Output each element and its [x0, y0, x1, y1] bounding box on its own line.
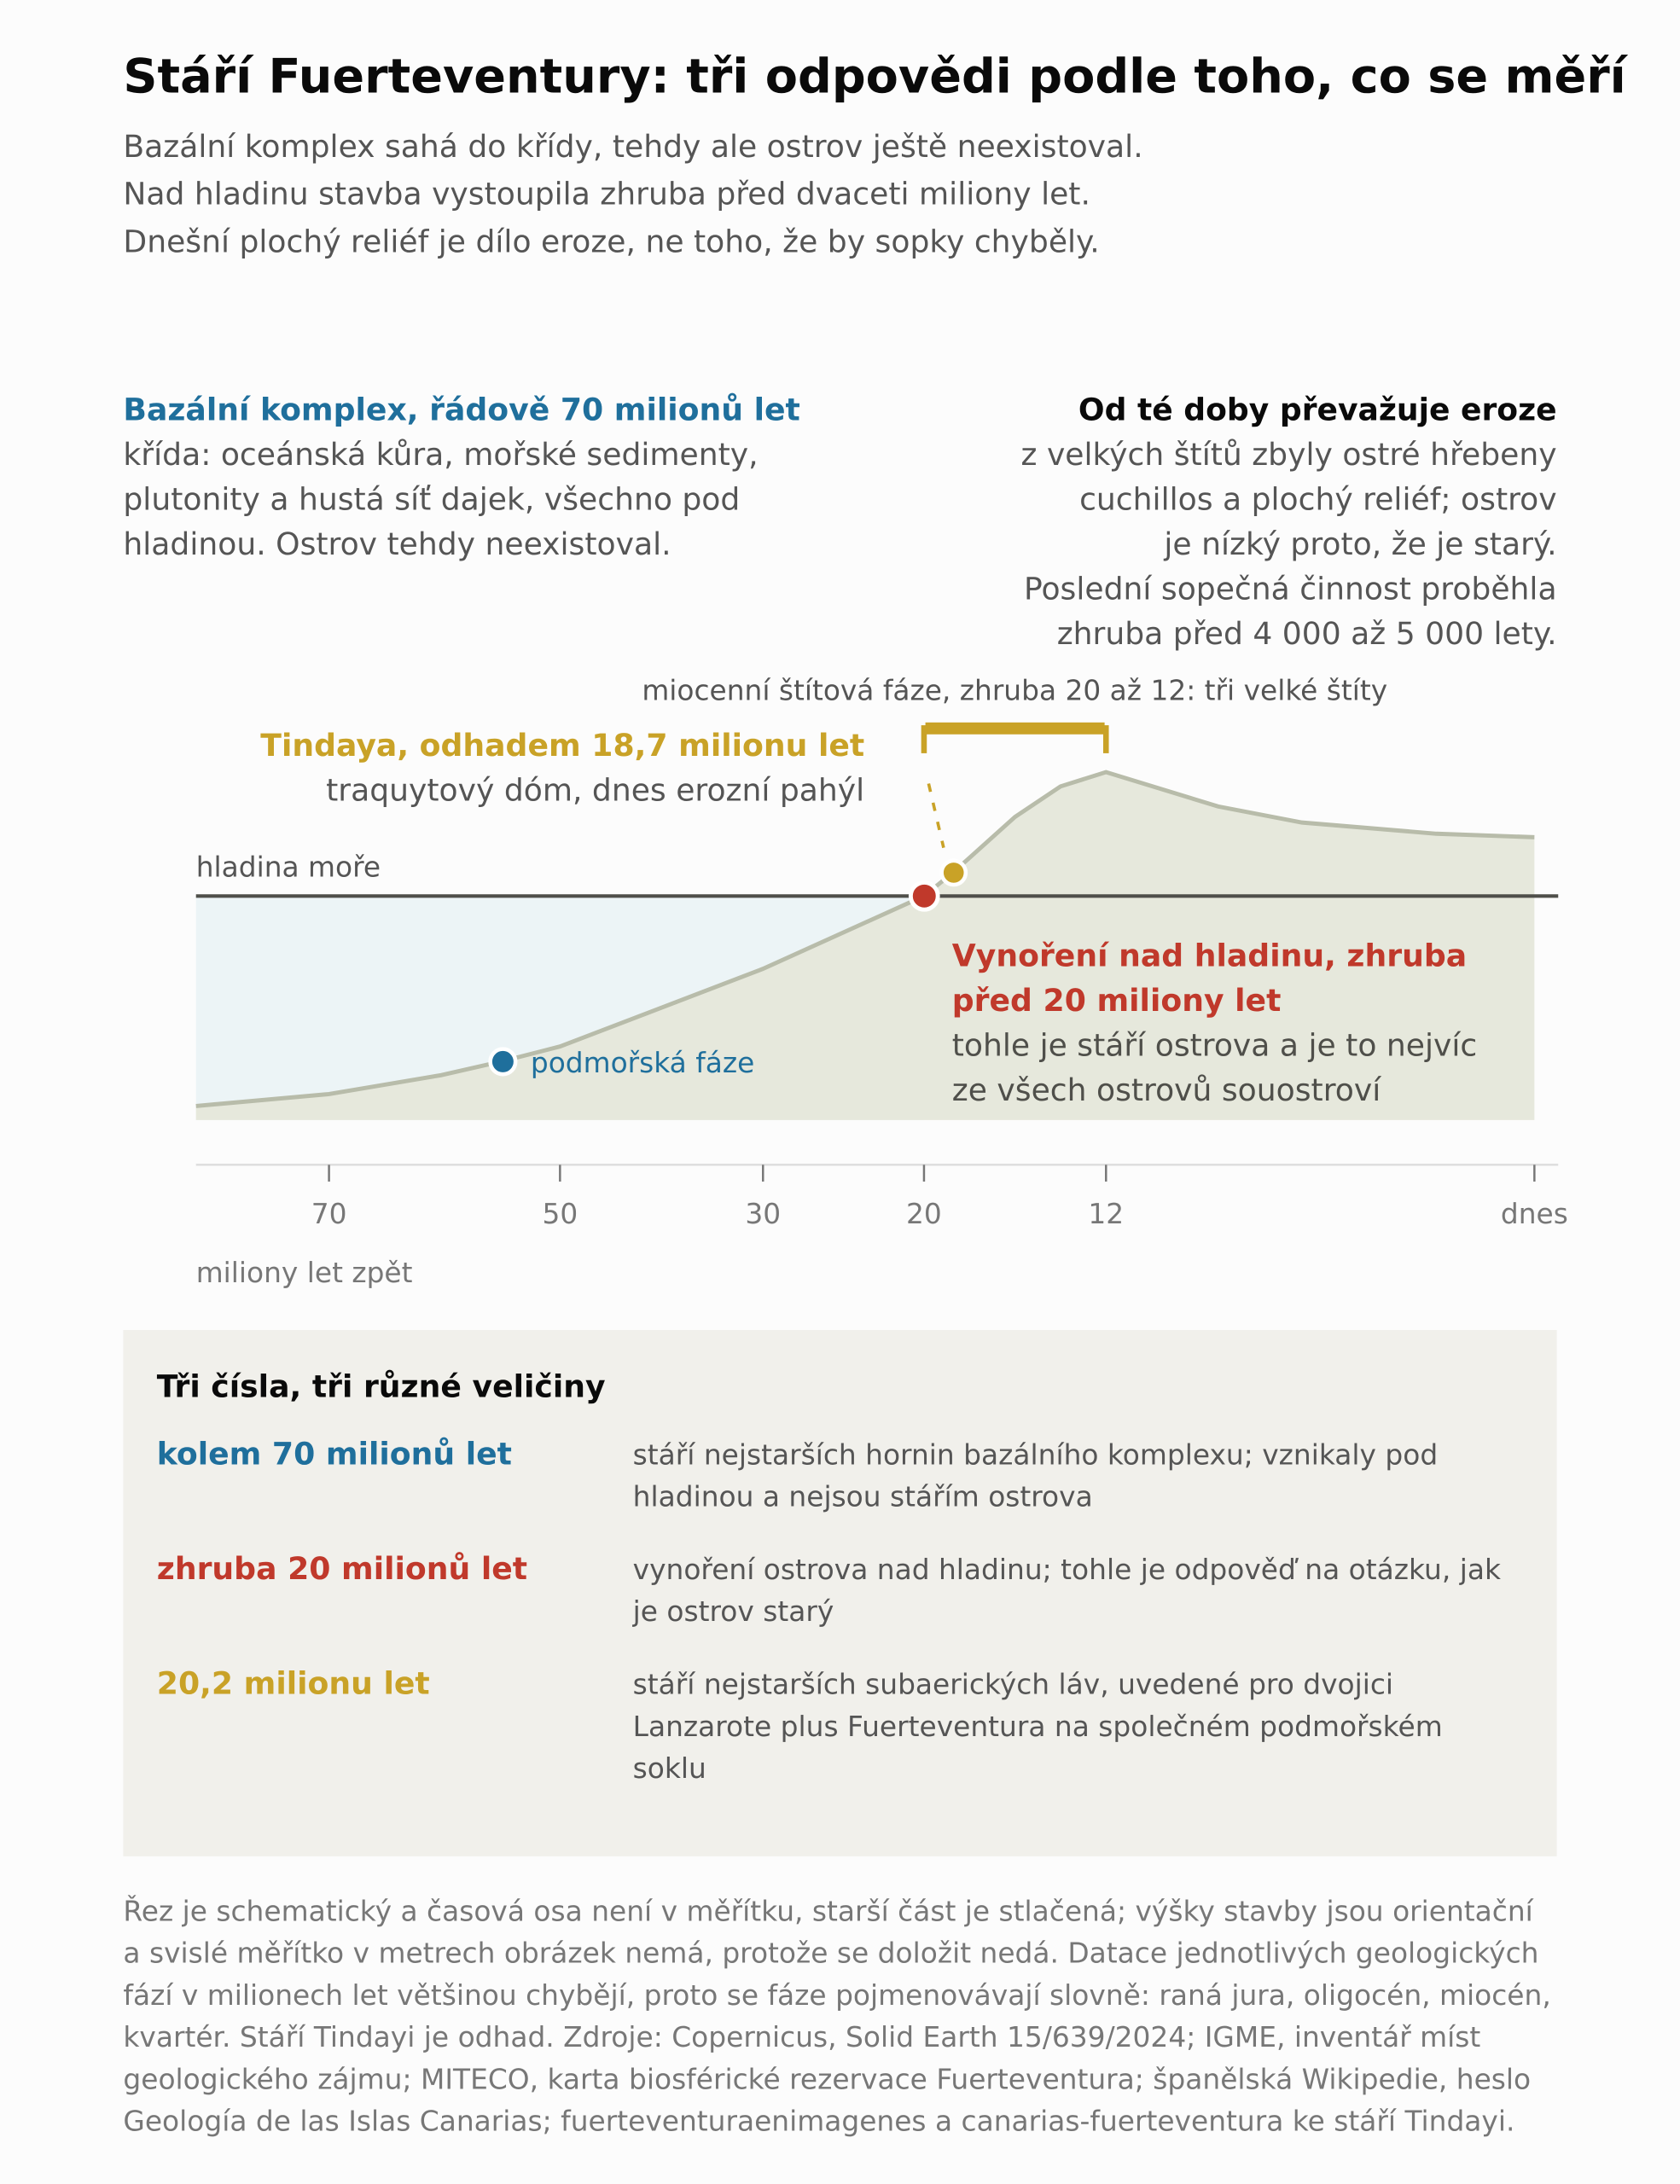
annotation: erosion: Poslední sopečná činnost proběhla [1024, 572, 1557, 607]
annotation: erosion: je nízký proto, že je starý. [1163, 528, 1557, 563]
annotation: basal complex: hladinou. Ostrov tehdy neexistoval. [123, 528, 671, 563]
time axis: 20 [906, 1197, 942, 1230]
Tindaya label [260, 729, 865, 810]
chart: island cross-section [196, 673, 1568, 1289]
footnote: Geología de las Islas Canarias; fuerteventuraenimagenes a canarias-fuerteventura ke stáří Tindayi. [123, 2104, 1514, 2138]
Tindaya leader line [928, 784, 944, 848]
footnote: a svislé měřítko v metrech obrázek nemá, protože se doložit nedá. Datace jednotlivých geologických [123, 1936, 1538, 1970]
annotation: basal complex: Bazální komplex, řádově 70 milionů let [123, 392, 801, 428]
subtitle: Nad hladinu stavba vystoupila zhruba před dvaceti miliony let. [123, 178, 1090, 213]
sea level line [196, 895, 1558, 897]
footnote: kvartér. Stáří Tindayi je odhad. Zdroje: Copernicus, Solid Earth 15/639/2024; IGME, inventář míst [123, 2020, 1481, 2053]
row: 20 million [157, 1551, 1502, 1628]
axis title: miliony let zpět [196, 1256, 413, 1289]
sea area [196, 896, 924, 1120]
marker: submarine phase [491, 1049, 515, 1074]
annotation: erosion [1021, 393, 1557, 653]
annotation: basal complex [123, 392, 801, 563]
emergence label: ze všech ostrovů souostroví [952, 1074, 1382, 1109]
subtitle [123, 131, 1143, 260]
footnote: geologického zájmu; MITECO, karta biosférické rezervace Fuerteventura; španělská Wikipedie, heslo [123, 2062, 1531, 2095]
emergence label [952, 939, 1477, 1109]
Tindaya label: traquytový dóm, dnes erozní pahýl [326, 775, 864, 810]
miocene bracket [921, 723, 1109, 753]
row: 70 million: stáří nejstarších hornin bazálního komplexu; vznikaly pod [633, 1438, 1438, 1472]
row: 70 million: kolem 70 milionů let [157, 1437, 513, 1472]
annotation: basal complex: křída: oceánská kůra, mořské sedimenty, [123, 439, 759, 473]
emergence label: Vynoření nad hladinu, zhruba [952, 939, 1467, 974]
time axis: 12 [1088, 1197, 1124, 1230]
marker: Tindaya [942, 861, 966, 885]
annotation: erosion: Od té doby převažuje eroze [1078, 393, 1557, 428]
row: 20 million: je ostrov starý [631, 1594, 834, 1628]
title: Stáří Fuerteventury: tři odpovědi podle toho, co se měří [123, 50, 1630, 105]
row: 20 million: zhruba 20 milionů let [157, 1551, 528, 1588]
subtitle: Dnešní plochý reliéf je dílo eroze, ne toho, že by sopky chyběly. [123, 225, 1100, 260]
time axis: dnes [1501, 1197, 1568, 1230]
land area [196, 772, 1534, 1120]
annotation: erosion: cuchillos a plochý reliéf; ostrov [1079, 483, 1557, 518]
panel heading: Tři čísla, tři různé veličiny [157, 1369, 606, 1406]
Tindaya label: Tindaya, odhadem 18,7 milionu let [260, 729, 865, 764]
annotation: erosion: z velkých štítů zbyly ostré hřebeny [1021, 439, 1557, 473]
row: 70 million [157, 1437, 1438, 1513]
time axis: 30 [745, 1197, 781, 1230]
miocene phase label: miocenní štítová fáze, zhruba 20 až 12: tři velké štíty [642, 673, 1387, 707]
emergence label: před 20 miliony let [952, 985, 1282, 1019]
row: 20.2 million: soklu [633, 1751, 706, 1785]
row: 20.2 million: Lanzarote plus Fuerteventura na společném podmořském [633, 1710, 1443, 1743]
row: 20 million: vynoření ostrova nad hladinu; tohle je odpověď na otázku, jak [633, 1553, 1502, 1586]
land profile line [196, 772, 1534, 1106]
footnote: Řez je schematický a časová osa není v měřítku, starší část je stlačená; výšky stavby jsou orientační [123, 1894, 1535, 1928]
row: 20.2 million: stáří nejstarších subaerických láv, uvedené pro dvojici [633, 1667, 1393, 1701]
time axis [196, 1165, 1568, 1230]
row: 20.2 million [157, 1667, 1443, 1785]
emergence label: tohle je stáří ostrova a je to nejvíc [952, 1029, 1477, 1064]
marker: emergence [910, 882, 938, 909]
annotation: erosion: zhruba před 4 000 až 5 000 lety. [1057, 618, 1557, 653]
annotation: basal complex: plutonity a hustá síť dajek, všechno pod [123, 483, 740, 518]
submarine phase label: podmořská fáze [531, 1046, 754, 1079]
footnote [123, 1894, 1551, 2138]
panel: three numbers [123, 1330, 1557, 1856]
time axis: 70 [311, 1197, 346, 1230]
footnote: fází v milionech let většinou chybějí, proto se fáze pojmenovávají slovně: raná jura, oligocén, miocén, [123, 1978, 1551, 2012]
subtitle: Bazální komplex sahá do křídy, tehdy ale ostrov ještě neexistoval. [123, 131, 1143, 166]
row: 70 million: hladinou a nejsou stářím ostrova [633, 1480, 1093, 1513]
sea level label: hladina moře [196, 850, 381, 884]
time axis: 50 [542, 1197, 578, 1230]
row: 20.2 million: 20,2 milionu let [157, 1667, 430, 1702]
